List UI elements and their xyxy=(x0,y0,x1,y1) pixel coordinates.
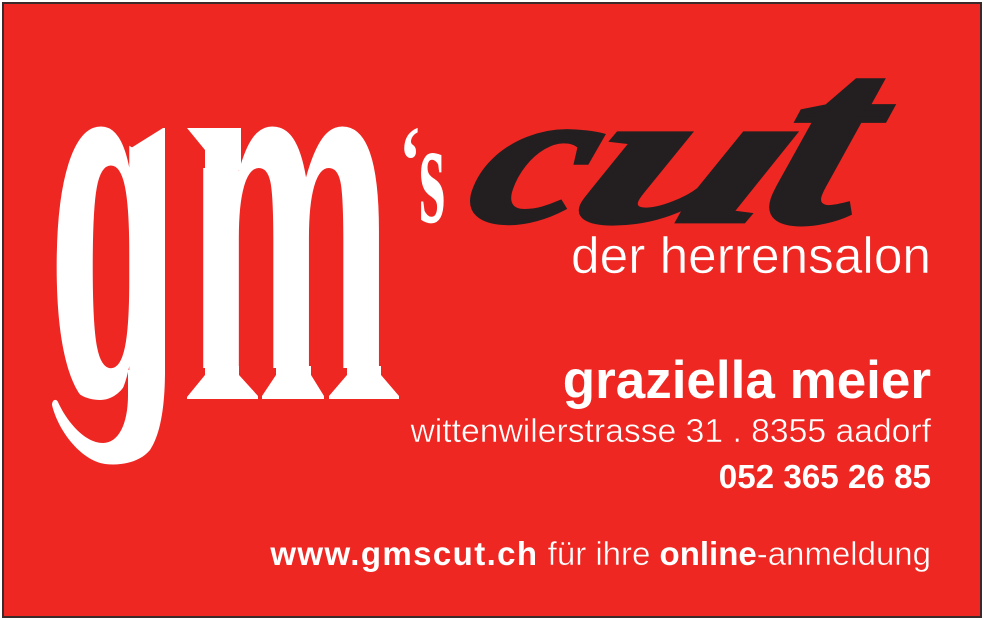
website line: www.gmscut.ch für ihre online-anmeldung xyxy=(269,535,931,572)
logo: cut: u xyxy=(544,51,843,262)
address: wittenwilerstrasse 31 . 8355 aadorf xyxy=(409,412,932,450)
logo: cut xyxy=(447,1,928,275)
tagline: der herrensalon: der herrensalon xyxy=(571,226,931,284)
logo: cut: t xyxy=(739,1,928,275)
logo: apostrophe s xyxy=(399,91,445,254)
logo: apostrophe s: s xyxy=(419,91,445,254)
logo: cut: c xyxy=(447,52,634,263)
logo: apostrophe s: ‘ xyxy=(399,107,421,216)
name: graziella meier: graziella meier xyxy=(563,351,931,410)
logo: gm xyxy=(52,126,399,464)
phone number: 052 365 26 85 xyxy=(719,459,931,496)
